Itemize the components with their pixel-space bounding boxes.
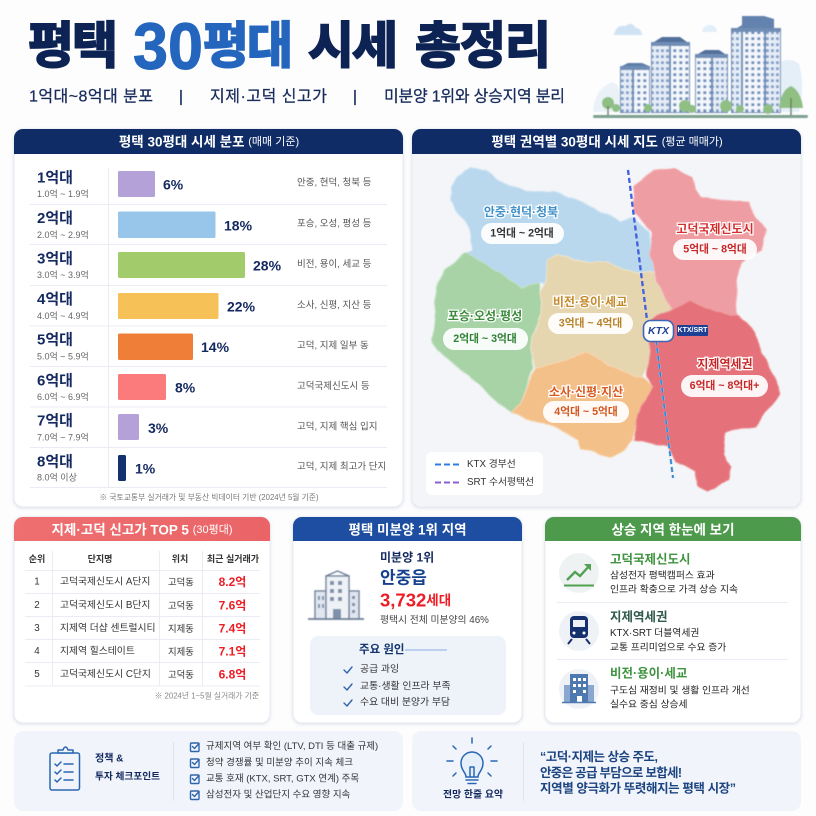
row: 5억대: 14% — [201, 339, 230, 355]
item: Jije: KTX·SRT 더블역세권 — [610, 627, 699, 639]
region: center (tan) — [531, 255, 671, 378]
checkpoint list — [190, 740, 378, 800]
table row 5 — [34, 668, 246, 682]
panel: checkpoints — [14, 731, 403, 811]
row: 8억대: 1% — [135, 460, 156, 476]
map label: north — [481, 204, 564, 244]
table row 4 — [34, 644, 246, 658]
map label: west: 2억대 ~ 3억대 — [453, 332, 517, 345]
checkpoint list: 청약 경쟁률 및 미분양 추이 지속 체크 — [206, 756, 353, 768]
table head — [29, 553, 260, 564]
row: 3억대: 비전, 용이, 세교 등 — [297, 259, 372, 270]
map label: south — [543, 385, 629, 423]
row: 6억대: 6억대 — [37, 372, 73, 390]
panel: unsold homes — [293, 517, 522, 723]
table head: 위치 — [172, 553, 188, 564]
icon: rising chart — [559, 553, 599, 593]
legend — [426, 452, 543, 495]
table row 5: 6.8억 — [219, 668, 246, 682]
row: 3억대: 3억대 — [37, 250, 73, 268]
map label: center: 비전·용이·세교 — [553, 295, 627, 309]
item: Bijeon: 비전·용이·세교 — [610, 666, 687, 680]
outlook quote: “고덕·지제는 상승 주도, — [540, 749, 658, 764]
checkpoint list: 교통 호재 (KTX, SRT, GTX 연계) 주목 — [206, 772, 359, 784]
panel: rising areas — [545, 517, 801, 723]
icon: clipboard — [50, 747, 80, 790]
icon: building — [308, 571, 364, 619]
subtitle — [29, 88, 565, 106]
header: top 5 — [14, 517, 270, 541]
row: 5억대: 5억대 — [37, 332, 73, 348]
subtitle: 지제·고덕 신고가 — [210, 88, 327, 106]
row: 5억대 — [37, 332, 369, 362]
map regions — [433, 168, 781, 492]
panel: outlook — [412, 731, 801, 811]
table row 4: 7.1억 — [219, 644, 246, 658]
row: 6억대: 8% — [175, 380, 196, 396]
row: 7억대: 고덕, 지제 핵심 입지 — [297, 420, 377, 432]
table row 3 — [34, 621, 246, 636]
item: Bijeon — [559, 666, 750, 710]
item: Godeok: 삼성전자 평택캠퍼스 효과 — [610, 570, 715, 582]
map label: center: 3억대 ~ 4억대 — [559, 316, 622, 330]
station badge: KTX/SRT — [678, 327, 708, 334]
row: 8억대: 8.0억 이상 — [37, 472, 77, 482]
region: west (green) — [433, 253, 541, 413]
table row 1: 8.2억 — [219, 575, 246, 589]
footnote: ※ 국토교통부 실거래가 및 부동산 빅데이터 기반 (2024년 5월 기준) — [99, 492, 319, 502]
map label: north: 안중·현덕·청북 — [484, 204, 558, 219]
row: 1억대: 안중, 현덕, 청북 등 — [297, 178, 372, 188]
table head: 최근 실거래가 — [207, 553, 260, 564]
header: price distribution — [14, 129, 403, 154]
unsold headline: 안중읍 — [380, 568, 427, 588]
map label: center — [548, 295, 633, 334]
row: 4억대: 4.0억 ~ 4.9억 — [37, 310, 89, 321]
table head: 단지명 — [88, 553, 112, 564]
table row 1: 고덕국제신도시 A단지 — [60, 576, 150, 588]
table row 4: 지제역 힐스테이트 — [60, 644, 135, 657]
icon: train — [559, 611, 599, 651]
row: 3억대: 3.0억 ~ 3.9억 — [37, 269, 89, 280]
table note: ※ 2024년 1~5월 실거래가 기준 — [155, 690, 259, 700]
row: 1억대: 6% — [163, 176, 184, 192]
region: north (blue) — [450, 168, 655, 287]
row: 2억대: 2억대 — [37, 210, 73, 227]
header: price map: 평택 권역별 30평대 시세 지도 (평균 매매가) — [491, 134, 723, 150]
header: top 5: 지제·고덕 신고가 TOP 5 (30평대) — [51, 522, 233, 538]
item: Godeok: 고덕국제신도시 — [610, 552, 691, 566]
title: 시세 — [308, 18, 398, 74]
table row 5: 5 — [34, 669, 40, 680]
table row 5: 고덕국제신도시 C단지 — [60, 668, 151, 680]
station badge — [644, 320, 708, 342]
item: Jije — [559, 609, 726, 654]
row: 4억대: 소사, 신평, 지산 등 — [297, 300, 372, 311]
row: 6억대 — [37, 372, 370, 402]
table row 1: 1 — [34, 576, 40, 588]
row: 6억대: 고덕국제신도시 등 — [297, 381, 370, 392]
map label: southeast: 지제역세권 — [697, 356, 753, 371]
row: 3억대: 28% — [253, 258, 282, 274]
map label: south: 4억대 ~ 5억대 — [554, 405, 618, 418]
table row 4: 4 — [34, 646, 40, 657]
panel: top 5 table — [14, 517, 270, 723]
illustration: apartment buildings — [593, 16, 808, 118]
subtitle: | — [353, 88, 357, 106]
header: unsold — [293, 517, 522, 541]
row: 2억대: 포승, 오성, 평성 등 — [297, 218, 372, 230]
main causes: 교통·생활 인프라 부족 — [360, 679, 451, 692]
row: 4억대: 4억대 — [37, 291, 73, 308]
unsold headline: 미분양 1위 — [380, 550, 434, 564]
panel: price map — [412, 129, 801, 507]
subtitle: 미분양 1위와 상승지역 분리 — [384, 88, 565, 106]
panel: price distribution — [14, 129, 403, 507]
row: 2억대 — [37, 210, 372, 240]
item: Jije: 교통 프리미엄으로 수요 증가 — [610, 642, 726, 654]
outlook quote: 지역별 양극화가 뚜렷해지는 평택 시장” — [540, 780, 736, 796]
title: 총정리 — [415, 18, 551, 74]
row: 7억대 — [37, 412, 377, 442]
table row 5: 고덕동 — [168, 669, 194, 680]
legend: SRT 수서평택선 — [467, 476, 534, 488]
row: 4억대: 22% — [227, 298, 256, 314]
map label: west: 포승·오성·평성 — [448, 309, 522, 323]
checkpoint list: 규제지역 여부 확인 (LTV, DTI 등 대출 규제) — [206, 740, 378, 752]
map label: northeast: 5억대 ~ 8억대 — [683, 242, 747, 256]
table row 1: 고덕동 — [168, 576, 194, 588]
map label: north: 1억대 ~ 2억대 — [490, 226, 554, 240]
header: rising areas — [545, 517, 801, 541]
row: 7억대: 7.0억 ~ 7.9억 — [37, 432, 89, 442]
table row 2: 고덕국제신도시 B단지 — [60, 599, 150, 611]
main causes: 수요 대비 분양가 부담 — [360, 696, 450, 708]
checkpoint list: 삼성전자 및 산업단지 수요 영향 지속 — [206, 788, 351, 800]
table head: 순위 — [29, 553, 45, 564]
icon: light bulb — [447, 738, 497, 784]
row: 7억대: 7억대 — [37, 412, 73, 430]
item: Godeok: 인프라 확충으로 가격 상승 지속 — [610, 582, 738, 596]
table row 2: 고덕동 — [168, 600, 194, 611]
subtitle: | — [179, 88, 183, 106]
table row 3: 지제역 더샵 센트럴시티 — [60, 621, 156, 634]
map label: south: 소사·신평·지산 — [549, 385, 623, 399]
unsold headline: 평택시 전체 미분양의 46% — [380, 614, 489, 626]
unsold headline — [380, 550, 489, 626]
table row 2: 7.6억 — [219, 598, 246, 612]
row: 5억대: 고덕, 지제 일부 동 — [297, 340, 369, 352]
icon: apartment — [559, 669, 599, 709]
station badge: KTX — [648, 325, 670, 337]
map label: northeast — [673, 221, 757, 260]
main causes — [310, 636, 506, 715]
title — [28, 9, 551, 83]
map label: southeast — [681, 356, 768, 397]
row: 3억대 — [37, 250, 372, 280]
row: 1억대: 1억대 — [37, 170, 73, 186]
item: Bijeon: 구도심 재정비 및 생활 인프라 개선 — [610, 684, 750, 696]
table row 2 — [34, 598, 246, 612]
checkpoint title — [95, 752, 160, 782]
unsold headline: 3,732세대 — [380, 590, 451, 610]
region: northeast (pink) — [633, 168, 766, 315]
railway lines — [628, 170, 673, 478]
row: 8억대 — [37, 454, 386, 482]
table row 4: 지제동 — [168, 646, 194, 657]
header: price distribution: 평택 30평대 시세 분포 (매매 기준) — [119, 134, 299, 150]
item: Bijeon: 실수요 중심 상승세 — [610, 698, 688, 710]
header: price map — [412, 129, 801, 154]
region: south (orange) — [513, 352, 653, 457]
row: 1억대 — [37, 170, 372, 199]
map label: northeast: 고덕국제신도시 — [676, 221, 754, 236]
title: 평대 — [203, 18, 293, 74]
row: 8억대: 8억대 — [37, 454, 73, 470]
item: Godeok — [559, 552, 738, 596]
row: 2억대: 18% — [224, 218, 253, 234]
row: 2억대: 2.0억 ~ 2.9억 — [37, 229, 89, 240]
row: 4억대 — [37, 291, 372, 321]
region: southeast (red) — [635, 302, 781, 492]
checkpoint title: 투자 체크포인트 — [95, 770, 160, 782]
table row 1 — [34, 575, 246, 589]
header: unsold: 평택 미분양 1위 지역 — [348, 522, 467, 538]
main causes: 주요 원인 — [359, 642, 405, 656]
map label: west — [443, 309, 528, 350]
row: 7억대: 3% — [148, 420, 169, 436]
outlook label: 전망 한줄 요약 — [443, 788, 503, 800]
legend: KTX 경부선 — [467, 457, 516, 470]
table row 2: 2 — [34, 600, 40, 611]
subtitle: 1억대~8억대 분포 — [29, 88, 153, 106]
item: Jije: 지제역세권 — [610, 609, 668, 624]
checkpoint title: 정책 & — [95, 752, 123, 764]
row: 8억대: 고덕, 지제 최고가 단지 — [297, 462, 386, 472]
outlook quote — [540, 749, 736, 796]
row: 1억대: 1.0억 ~ 1.9억 — [37, 188, 89, 199]
main causes: 공급 과잉 — [360, 663, 399, 675]
row: 6억대: 6.0억 ~ 6.9억 — [37, 391, 89, 402]
header: rising areas: 상승 지역 한눈에 보기 — [611, 522, 735, 538]
row: 5억대: 5.0억 ~ 5.9억 — [37, 350, 89, 362]
table row 3: 지제동 — [168, 623, 194, 634]
title: 평택 — [28, 18, 118, 74]
outlook quote: 안중은 공급 부담으로 보합세! — [540, 765, 682, 780]
table row 3: 3 — [34, 623, 40, 634]
title: 30 — [133, 9, 203, 83]
map label: southeast: 6억대 ~ 8억대+ — [690, 379, 759, 392]
table row 3: 7.4억 — [219, 622, 246, 636]
